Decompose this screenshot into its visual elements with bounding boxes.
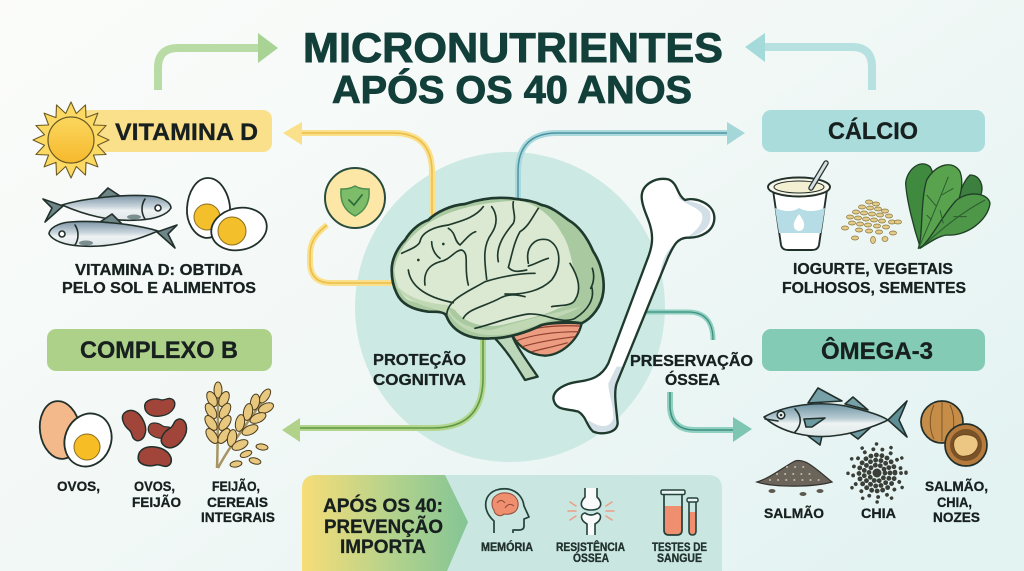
caption: cálcio: IOGURTE, VEGETAIS bbox=[793, 261, 953, 278]
icon: walnuts bbox=[921, 401, 987, 466]
icon: sun bbox=[33, 102, 109, 178]
caption: salmão, chia, nozes: CHIA, bbox=[937, 494, 972, 510]
caption: cálcio bbox=[782, 261, 966, 297]
icon: bone bbox=[553, 179, 714, 433]
label: proteção cognitiva: PROTEÇÃO bbox=[373, 349, 466, 369]
heading: vitamina D bbox=[80, 110, 272, 152]
panel: após os 40 prevenção bbox=[302, 475, 722, 571]
icon: eggs bbox=[36, 398, 119, 474]
callout: prevenção importa: IMPORTA bbox=[340, 536, 426, 558]
callout: prevenção importa: APÓS OS 40: bbox=[323, 493, 443, 517]
caption: vitamina D bbox=[62, 262, 256, 297]
callout: prevenção importa: PREVENÇÃO bbox=[324, 515, 443, 538]
icon: shield badge bbox=[325, 168, 385, 228]
icon: spinach bbox=[906, 164, 990, 249]
caption: feijão, cereais integrais: FEIJÃO, bbox=[212, 477, 260, 494]
callout: prevenção importa bbox=[302, 475, 468, 571]
label: memória: MEMÓRIA bbox=[481, 541, 533, 554]
caption: chia: CHIA bbox=[861, 505, 896, 521]
label: preservação óssea: ÓSSEA bbox=[665, 370, 720, 389]
icon: flax pile bbox=[757, 460, 832, 496]
heading: vitamina D: VITAMINA D bbox=[115, 119, 258, 146]
icon: seeds bbox=[842, 200, 902, 244]
icon: yogurt bbox=[768, 163, 830, 250]
panel: cálcio bbox=[762, 110, 990, 297]
label: resistência óssea: RESISTÊNCIA bbox=[556, 541, 625, 554]
panel: ômega-3 bbox=[757, 329, 988, 525]
heading: ômega-3: ÔMEGA-3 bbox=[821, 337, 933, 365]
icon: brain bbox=[392, 198, 604, 380]
label: proteção cognitiva bbox=[373, 349, 466, 389]
caption: salmão, chia, nozes bbox=[925, 477, 988, 525]
title: APÓS OS 40 ANOS bbox=[332, 68, 692, 112]
icon: beans bbox=[120, 396, 192, 470]
label: testes de sangue: TESTES DE bbox=[652, 542, 707, 554]
title bbox=[303, 24, 723, 112]
caption: feijão, cereais integrais bbox=[201, 477, 275, 525]
icon: joint bbox=[568, 488, 614, 535]
heading: complexo B bbox=[47, 329, 272, 371]
arrow: brain to calcio bbox=[518, 122, 745, 200]
panel: vitamina D bbox=[33, 102, 272, 297]
caption: ovos, feijão bbox=[132, 478, 181, 510]
arrow: bone top connector bbox=[645, 312, 713, 340]
label: preservação óssea bbox=[630, 350, 753, 389]
caption: cálcio: FOLHOSOS, SEMENTES bbox=[782, 280, 966, 297]
caption: salmão, chia, nozes: SALMÃO, bbox=[925, 477, 988, 494]
arrow: brain to complexo B bbox=[282, 335, 483, 442]
icon: sardines bbox=[43, 188, 177, 248]
caption: ovos: OVOS, bbox=[57, 478, 100, 494]
arrow: brain to vitamina D bbox=[283, 122, 432, 215]
title: MICRONUTRIENTES bbox=[303, 24, 723, 71]
panel: complexo B bbox=[36, 329, 275, 525]
heading: ômega-3 bbox=[762, 329, 985, 371]
icon: memória head bbox=[486, 489, 529, 533]
icon: test tubes bbox=[661, 490, 698, 535]
caption: ovos, feijão: OVOS, bbox=[134, 478, 175, 494]
caption: salmão: SALMÃO bbox=[764, 504, 824, 521]
heading: cálcio: CÁLCIO bbox=[828, 117, 918, 145]
arrow: bone to omega-3 bbox=[670, 392, 752, 442]
caption: feijão, cereais integrais: CEREAIS bbox=[207, 494, 268, 510]
caption: ovos, feijão: FEIJÃO bbox=[132, 493, 181, 510]
icon: salmon bbox=[764, 388, 907, 445]
label: preservação óssea: PRESERVAÇÃO bbox=[630, 350, 753, 370]
label: proteção cognitiva: COGNITIVA bbox=[373, 372, 466, 389]
heading: cálcio bbox=[762, 110, 985, 152]
icon: wheat bbox=[202, 382, 275, 468]
caption: vitamina D: PELO SOL E ALIMENTOS bbox=[62, 280, 256, 297]
label: resistência óssea: ÓSSEA bbox=[573, 552, 609, 565]
caption: salmão, chia, nozes: NOZES bbox=[933, 509, 980, 525]
icon: boiled eggs bbox=[187, 178, 271, 255]
caption: feijão, cereais integrais: INTEGRAIS bbox=[201, 509, 275, 525]
caption: vitamina D: VITAMINA D: OBTIDA bbox=[75, 262, 243, 279]
heading: complexo B: COMPLEXO B bbox=[80, 337, 238, 364]
label: testes de sangue bbox=[652, 542, 707, 565]
arrow: title left green bbox=[158, 33, 278, 90]
icon: chia bbox=[848, 444, 906, 502]
arrow: title right teal bbox=[745, 33, 872, 90]
label: resistência óssea bbox=[556, 541, 625, 565]
arrow: brain to shield loop bbox=[310, 225, 393, 283]
label: testes de sangue: SANGUE bbox=[657, 553, 702, 565]
